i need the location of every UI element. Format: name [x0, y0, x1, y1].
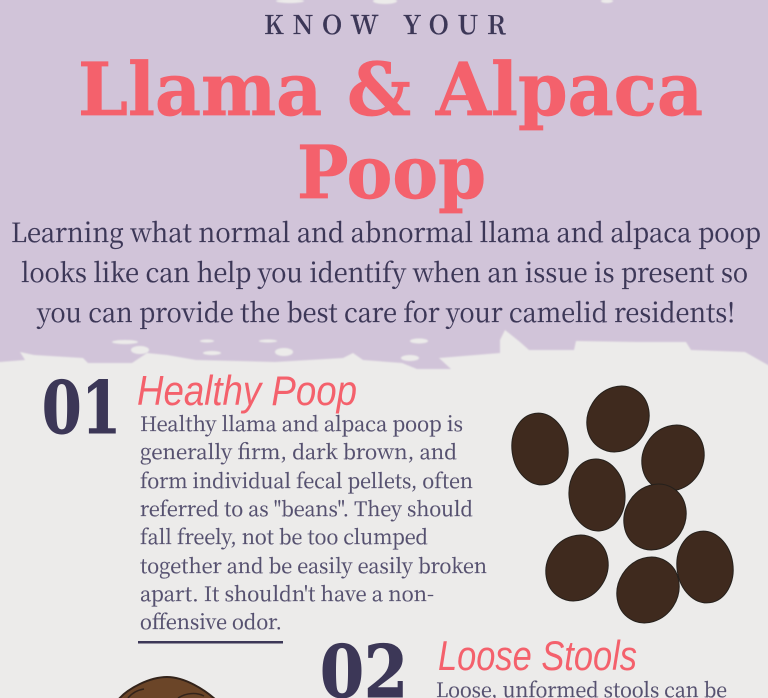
heading: know your: KNOW YOUR — [264, 5, 506, 42]
text block: healthy poop description — [140, 408, 487, 635]
heading: healthy poop: Healthy Poop — [137, 367, 357, 414]
text block: healthy poop description: form individual fecal pellets, often — [140, 465, 473, 494]
intro text block: you can provide the best care for your camelid residents! — [36, 291, 735, 330]
text block: healthy poop description: referred to as "beans". They should — [140, 493, 473, 522]
intro text block: looks like can help you identify when an issue is present so — [21, 251, 748, 290]
title line 1: Llama & Alpaca — [78, 47, 703, 133]
text block: healthy poop description: fall freely, not be too clumped — [140, 521, 428, 550]
icon: loose stool pile — [118, 677, 216, 698]
icon: healthy fecal pellets — [507, 374, 738, 635]
heading: loose stools: Loose Stools — [438, 632, 637, 679]
intro text block: Learning what normal and abnormal llama and alpaca poop — [11, 211, 761, 250]
text block: healthy poop description: Healthy llama and alpaca poop is — [140, 408, 463, 437]
panel: purple brush header — [0, 0, 768, 369]
intro text block — [11, 211, 761, 330]
text block: healthy poop description: generally firm, dark brown, and — [140, 436, 457, 465]
number 01: 01 — [42, 365, 121, 450]
text block: healthy poop description: apart. It shouldn't have a non- — [140, 578, 434, 607]
text block: healthy poop description: offensive odor. — [140, 606, 282, 635]
title line 2: Poop — [297, 130, 486, 216]
text block: healthy poop description: together and be easily easily broken — [140, 550, 487, 579]
title — [78, 47, 703, 216]
